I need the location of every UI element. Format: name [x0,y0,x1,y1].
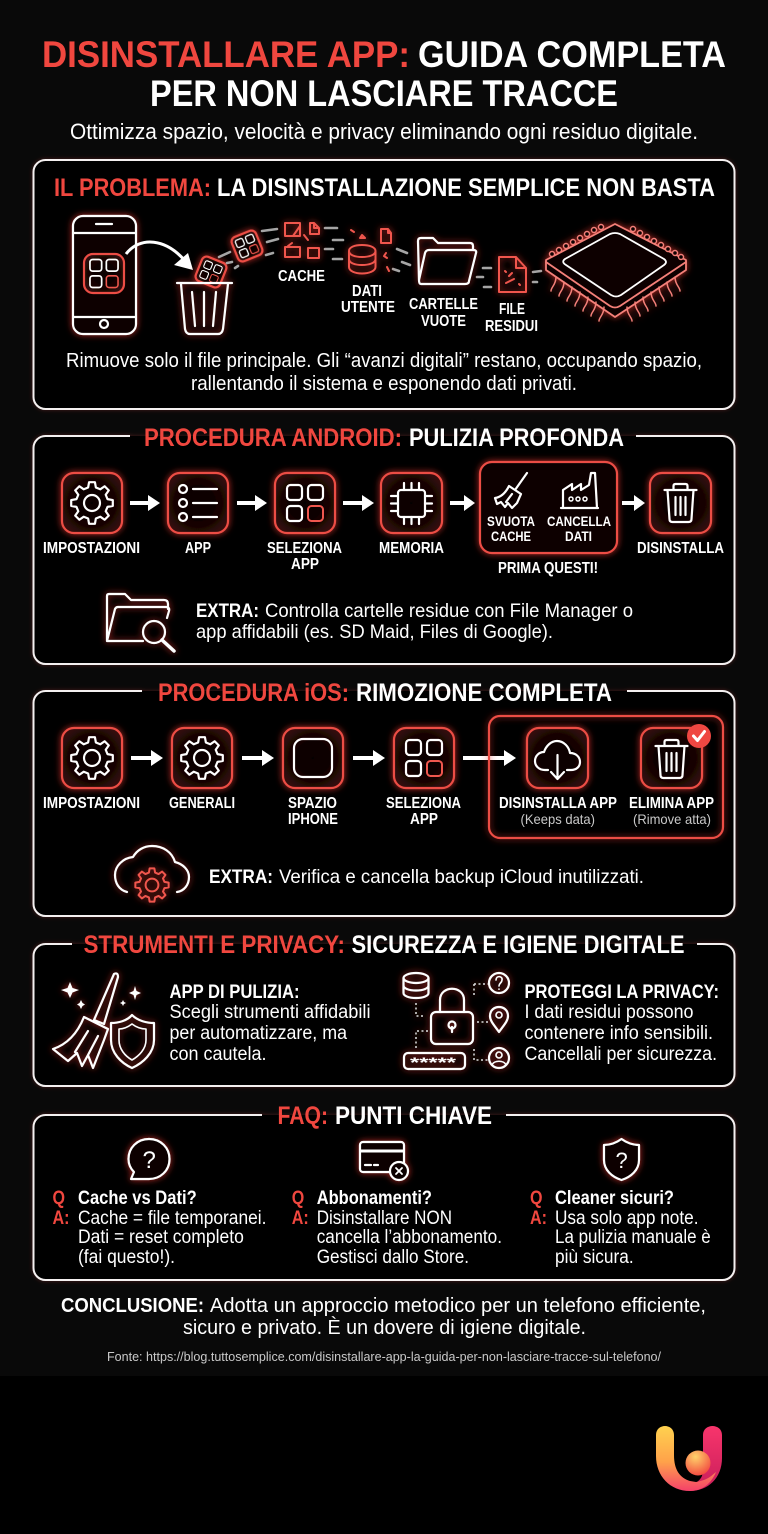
heading: faq: PUNTI CHIAVE [335,1102,492,1130]
icon: database [349,229,391,274]
label: file residui: FILE [499,301,525,318]
group: prima questi: CANCELLA [547,513,611,529]
icon: question bubble [128,1139,170,1179]
step: impostazioni: IMPOSTAZIONI [43,795,140,812]
faq: cache vs dati: (fai questo!). [78,1247,175,1268]
faq: cache vs dati: Cache = file temporanei. [78,1208,266,1229]
arrow [343,495,374,511]
arrow [463,750,516,766]
faq: cleaner sicuri [530,1139,711,1268]
icon: floating app [230,229,264,263]
icon: broom and shield [53,973,154,1068]
step: elimina app: (Rimove atta) [633,811,711,827]
group: disinstalla ed elimina [489,716,723,838]
step: elimina app: ELIMINA APP [629,795,714,812]
label: dati utente: UTENTE [341,299,395,316]
step: seleziona app: APP [410,811,438,828]
label: cache: CACHE [278,268,325,285]
step: spazio iphone: SPAZIO [288,795,337,812]
text: proteggi la privacy: Cancellali per sicurezza. [524,1044,717,1065]
step: disinstalla app: (Keeps data) [520,811,595,827]
icon: question shield [604,1139,639,1180]
panel: faq [34,1102,734,1280]
icon: cache files [285,223,319,258]
text: app di pulizia: APP DI PULIZIA: [170,982,300,1003]
icon: trash bin with app [177,255,232,334]
arrow [622,495,645,511]
step: generali [169,728,235,812]
logo [656,1426,722,1491]
title: DISINSTALLARE APP: [42,34,410,75]
title [42,34,726,114]
heading: procedura ios: RIMOZIONE COMPLETA [356,679,612,707]
heading: il problema: LA DISINSTALLAZIONE SEMPLICE NON BASTA [217,174,715,202]
faq: cache vs dati: Cache vs Dati? [78,1188,197,1209]
faq: cleaner sicuri: La pulizia manuale è [555,1227,711,1248]
panel: il problema [34,160,734,409]
faq: cleaner sicuri: Q [530,1188,542,1209]
icon: phone with app [73,216,136,334]
icon: card with x [360,1142,408,1180]
conclusion: sicuro e privato. È un dovere di igiene digitale. [183,1316,586,1339]
faq: cleaner sicuri: Cleaner sicuri? [555,1188,674,1209]
step: disinstalla app: DISINSTALLA APP [499,795,617,812]
group: prima questi: DATI [565,528,592,544]
subtitle: Ottimizza spazio, velocità e privacy eliminando ogni residuo digitale. [70,119,698,144]
panel: strumenti e privacy [34,931,734,1086]
text: app di pulizia: Scegli strumenti affidabili [170,1002,370,1023]
icon: security lock network [404,973,509,1070]
text: proteggi la privacy: I dati residui possono [524,1002,694,1023]
step: impostazioni [43,728,140,812]
icon: security lock network: ***** [410,1054,457,1070]
arrow [131,750,163,766]
heading: procedura ios [158,679,612,707]
heading: il problema [54,174,715,202]
text: android extra: app affidabili (es. SD Maid, Files di Google). [196,621,553,643]
heading: il problema: IL PROBLEMA: [54,174,211,202]
label: cartelle vuote [409,296,478,330]
text: android extra [196,600,633,643]
text: android extra: EXTRA: [196,600,259,622]
label: file residui: RESIDUI [485,318,538,335]
group: prima questi: CACHE [491,528,531,544]
text: ios extra: Verifica e cancella backup iCloud inutilizzati. [279,866,644,888]
step: seleziona app: SELEZIONA [267,540,342,557]
text: ios extra: EXTRA: [209,866,273,888]
title: PER NON LASCIARE TRACCE [150,73,618,114]
text: problem description: rallentando il sistema e esponendo dati privati. [191,373,577,395]
heading: faq [278,1102,492,1130]
label: dati utente: DATI [352,283,382,300]
heading: faq: FAQ: [278,1102,328,1130]
faq: cache vs dati: A: [52,1208,70,1229]
step: seleziona app [386,728,461,828]
step: disinstalla: DISINSTALLA [637,540,724,557]
text: problem description [66,350,702,395]
text: proteggi la privacy [524,982,719,1065]
faq: abbonamenti: Disinstallare NON [317,1208,452,1229]
source: Fonte: https://blog.tuttosemplice.com/disinstallare-app-la-guida-per-non-lasciare-tracce-sul-telefono/ [107,1349,661,1364]
arrow [130,495,160,511]
icon: residual file [499,257,526,292]
step: app [168,473,228,557]
step: memoria [379,473,444,557]
icon: empty folder [418,238,476,284]
faq: abbonamenti: A: [292,1208,309,1229]
text: app di pulizia: con cautela. [170,1044,266,1065]
step: seleziona app: SELEZIONA [386,795,461,812]
faq: cleaner sicuri: più sicura. [555,1247,634,1268]
heading: procedura android [144,424,624,452]
step: disinstalla app [499,728,617,827]
faq: abbonamenti: Gestisci dallo Store. [317,1247,469,1268]
text: app di pulizia [170,982,370,1065]
panel: procedura ios [34,679,734,916]
panel: procedura android [34,424,734,664]
icon: question shield: ? [616,1148,628,1173]
conclusion [61,1294,706,1339]
step: disinstalla [637,473,724,557]
arrow [237,495,267,511]
heading: procedura android: PROCEDURA ANDROID: [144,424,402,452]
conclusion: Adotta un approccio metodico per un telefono efficiente, [210,1294,706,1317]
step: generali: GENERALI [169,795,235,812]
arrow [242,750,274,766]
step: app: APP [185,540,211,557]
icon: cloud with gear [115,846,189,902]
icon: folder with magnifier [107,594,174,651]
faq: abbonamenti [292,1142,502,1268]
label: cartelle vuote: VUOTE [421,313,466,330]
arrow [353,750,385,766]
group: prima questi: PRIMA QUESTI! [498,560,598,577]
faq: cache vs dati: Q [52,1188,65,1209]
step: spazio iphone: IPHONE [288,811,338,828]
arrow: app to trash [126,242,193,270]
conclusion: CONCLUSIONE: [61,1295,204,1317]
icon: factory [561,473,598,508]
icon: chip [546,224,686,321]
heading: strumenti e privacy: STRUMENTI E PRIVACY: [84,931,345,959]
group: prima questi [480,462,617,577]
faq: abbonamenti: Q [292,1188,304,1209]
icon: check badge [687,724,711,748]
heading: strumenti e privacy [84,931,684,959]
faq: abbonamenti: Abbonamenti? [317,1188,432,1209]
step: impostazioni [43,473,140,557]
label: file residui [485,301,538,335]
text: problem description: Rimuove solo il file principale. Gli “avanzi digitali” restano, occupando spazio, [66,350,702,372]
label: cartelle vuote: CARTELLE [409,296,478,313]
faq: cleaner sicuri: Usa solo app note. [555,1208,698,1229]
step: seleziona app: APP [291,556,319,573]
step: impostazioni: IMPOSTAZIONI [43,540,140,557]
heading: procedura ios: PROCEDURA iOS: [158,679,349,707]
step: spazio iphone [283,728,343,828]
title: GUIDA COMPLETA [418,34,726,75]
dashes: debris trail [219,228,541,287]
text: android extra: Controlla cartelle residue con File Manager o [265,600,633,622]
heading: strumenti e privacy: SICUREZZA E IGIENE DIGITALE [352,931,684,959]
heading: procedura android: PULIZIA PROFONDA [409,424,624,452]
icon: broom [495,473,527,508]
icon: question bubble: ? [142,1147,156,1174]
text: proteggi la privacy: PROTEGGI LA PRIVACY: [524,982,719,1003]
step: seleziona app [267,473,342,573]
text: app di pulizia: per automatizzare, ma [170,1023,347,1044]
label: dati utente [341,283,395,316]
group: prima questi: SVUOTA [487,513,535,529]
faq: abbonamenti: cancella l’abbonamento. [317,1227,502,1248]
step: elimina app [629,724,714,827]
faq: cleaner sicuri: A: [530,1208,547,1229]
arrow [450,495,475,511]
faq: cache vs dati: Dati = reset completo [78,1227,244,1248]
step: memoria: MEMORIA [379,540,444,557]
faq: cache vs dati [52,1139,266,1268]
text: proteggi la privacy: contenere info sensibili. [524,1023,713,1044]
